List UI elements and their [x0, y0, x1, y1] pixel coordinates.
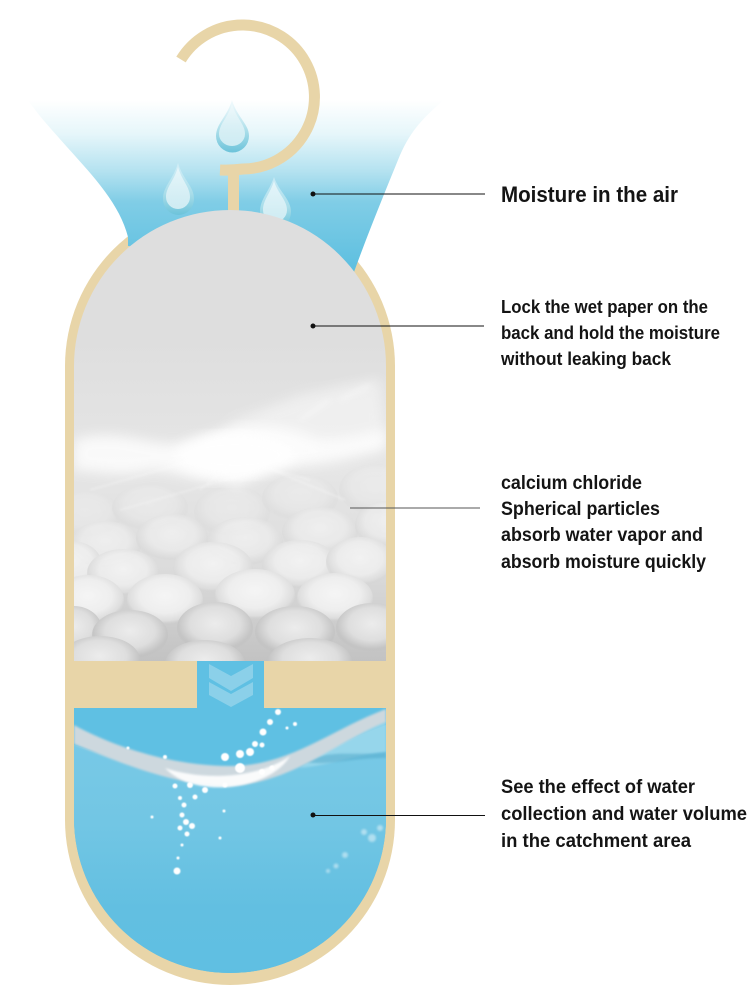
icon: water droplets: [163, 100, 291, 228]
icon: right droplet: [260, 177, 291, 228]
label: calcium chloride particles: absorb moisture quickly: [501, 552, 706, 573]
particle row 6: [74, 636, 348, 661]
label: calcium chloride particles: calcium chloride: [501, 473, 642, 494]
label: catchment area: collection and water volume: [501, 804, 747, 825]
capsule interior: [74, 210, 386, 973]
particle row 1: [49, 464, 411, 539]
label: catchment area: See the effect of water: [501, 777, 696, 798]
darker ripple at right: [305, 752, 386, 763]
label: calcium chloride particles: absorb water vapor and: [501, 525, 703, 546]
particle row 4: [74, 569, 372, 622]
connecting channel with arrow: [197, 661, 264, 709]
label: lock the wet paper: back and hold the moisture: [501, 323, 720, 343]
panel: calcium chloride spherical particles: [74, 505, 386, 661]
leader line: moisture in the air: [310, 192, 485, 196]
particle row 3: [74, 538, 386, 592]
channel: [197, 661, 264, 709]
capsule outer shell: [65, 201, 395, 985]
leader line: catchment: [310, 812, 485, 818]
faint bubbles at right: [326, 825, 383, 873]
catchment water: [74, 708, 386, 983]
particle row 5: [74, 602, 386, 652]
lighter band under right wave: [300, 720, 386, 768]
icon: top droplet: [216, 100, 249, 152]
water body below surface: [74, 725, 386, 985]
panel: back lock paper: [74, 205, 386, 665]
particle row 2: [79, 506, 386, 556]
leader line: back paper: [310, 324, 484, 328]
label: lock the wet paper: [500, 297, 720, 369]
label: catchment area: in the catchment area: [501, 831, 691, 852]
leader line: particles: [350, 507, 480, 509]
water vapor splash band: [74, 382, 386, 487]
water spray bubbles: [126, 709, 297, 874]
label: calcium chloride particles: Spherical particles: [501, 499, 660, 520]
label: calcium chloride particles: [501, 473, 706, 573]
label: catchment area: [501, 777, 747, 852]
label: lock the wet paper: Lock the wet paper on the: [501, 297, 708, 317]
label: moisture in the air: Moisture in the air: [501, 182, 678, 207]
icon: double chevron arrow: [209, 664, 253, 707]
water surface wave: [74, 709, 386, 786]
icon: hanging hook: [181, 25, 314, 214]
moisture in the air funnel: [28, 100, 444, 272]
label: lock the wet paper: without leaking back: [500, 349, 672, 369]
tan divider slabs: [74, 661, 386, 686]
wave highlight: [165, 756, 290, 787]
icon: left droplet: [163, 163, 194, 215]
